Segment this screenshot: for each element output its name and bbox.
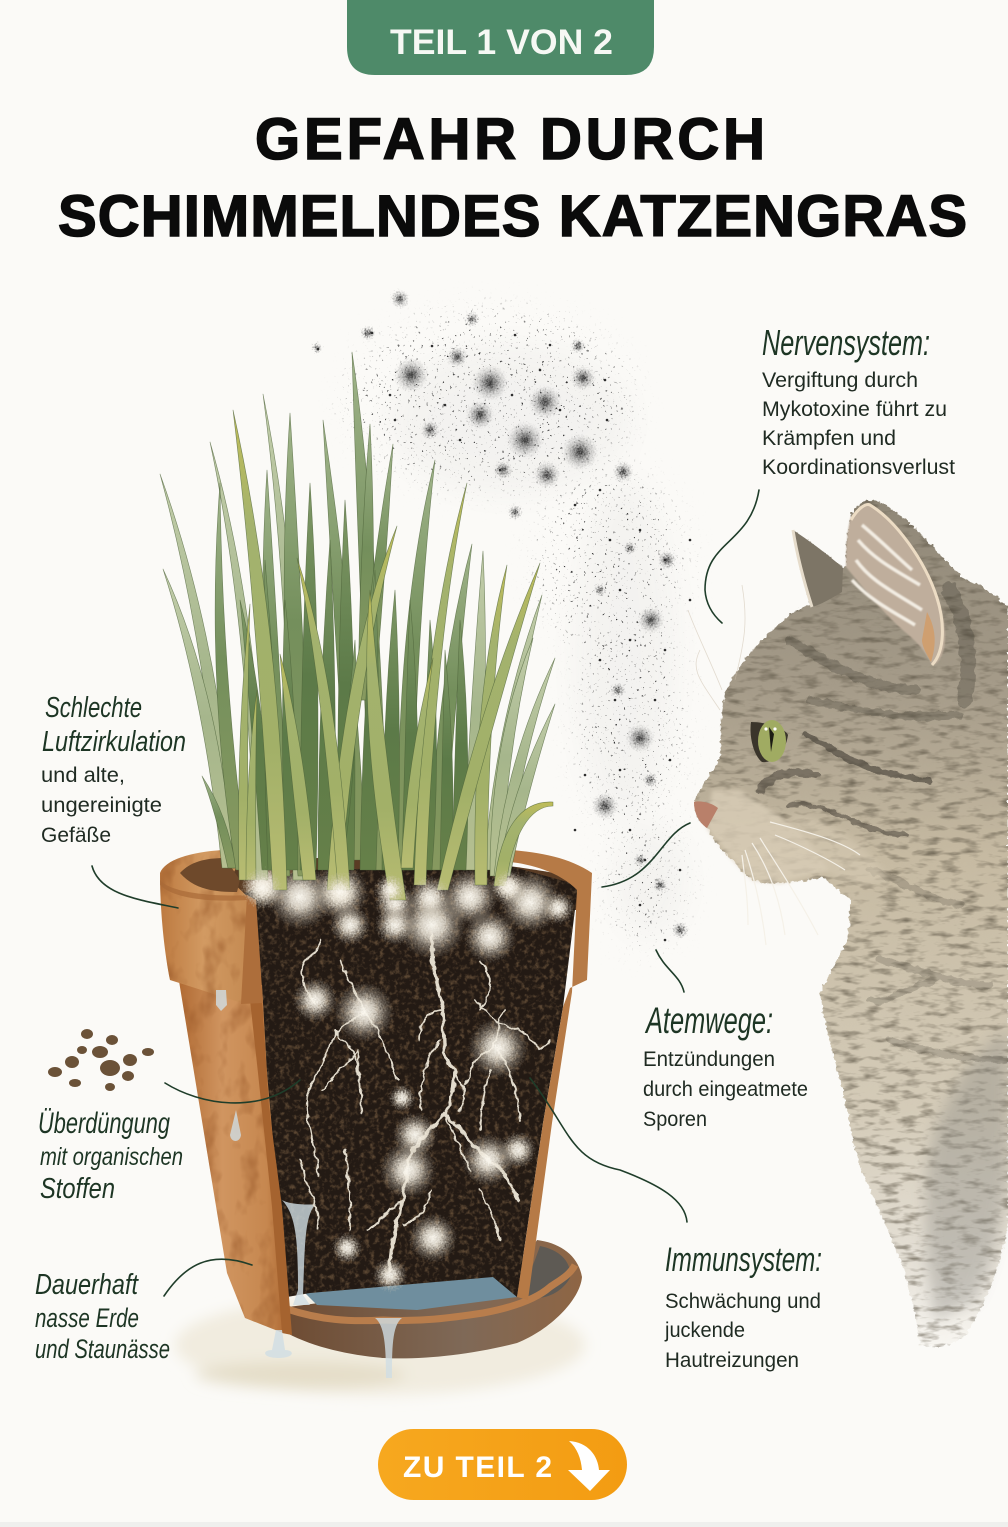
pot back wall (195, 858, 578, 910)
label: Nervensystem: Koordinationsverlust (762, 456, 955, 479)
label: Immunsystem: Hautreizungen (665, 1349, 799, 1372)
illustration: terracotta pot with mouldy soil (160, 850, 592, 1378)
label: Immunsystem (664, 1241, 822, 1372)
illustration: mould spore cloud (312, 290, 690, 945)
label: Atemwege (643, 1000, 808, 1131)
label: Dauerhaft nasse Erde: Dauerhaft (35, 1269, 140, 1301)
medium blades (202, 352, 472, 876)
label: Nervensystem: Krämpfen und (762, 427, 896, 450)
label: Überdüngung: mit organischen (40, 1143, 183, 1171)
illustration: tabby cat (688, 500, 1008, 1347)
label: Dauerhaft nasse Erde: und Staunässe (35, 1334, 170, 1364)
illustration: mould fringe over grass base (242, 868, 528, 920)
header tab: Teil 1 von 2: TEIL 1 VON 2 (390, 23, 613, 62)
label: Überdüngung: Stoffen (40, 1173, 115, 1205)
title: GEFAHR DURCH (255, 107, 765, 172)
leader lines (92, 490, 759, 1296)
cat body grey patch (926, 1030, 1008, 1320)
soil (193, 866, 578, 1297)
cat head and body (694, 500, 1008, 1347)
cat cheek light area (790, 815, 890, 884)
label: Immunsystem: Immunsystem: (665, 1241, 822, 1279)
dark middle blades (240, 483, 468, 870)
illustration: cat grass (160, 352, 555, 900)
pale back blades (160, 394, 555, 880)
label: Nervensystem: Mykotoxine führt zu (762, 398, 947, 421)
button: Zu Teil 2: ZU TEIL 2 (403, 1451, 552, 1484)
label: Schlechte Luftzirkulation (41, 692, 186, 847)
pot right wall and rim (510, 850, 592, 1300)
label: Atemwege: Entzündungen (643, 1048, 775, 1071)
icon: organic fertilizer pellets (48, 1029, 154, 1091)
cat nose (694, 801, 718, 828)
illustration: stain under pot (175, 1295, 585, 1395)
title (58, 107, 967, 249)
pot body (178, 975, 289, 1333)
standing water (305, 1275, 517, 1310)
mould roots (300, 935, 550, 1270)
cat eye (750, 720, 788, 762)
label: Schlechte Luftzirkulation: ungereinigte (41, 794, 162, 817)
front blades (233, 410, 553, 900)
label: Schlechte Luftzirkulation: Gefäße (41, 824, 111, 847)
label: Nervensystem: Nervensystem: (762, 322, 930, 363)
label: Immunsystem: juckende (664, 1319, 745, 1342)
label: Nervensystem: Vergiftung durch (762, 369, 918, 392)
saucer (287, 1240, 582, 1358)
label: Schlechte Luftzirkulation: Schlechte (45, 692, 142, 724)
white mould clusters (241, 861, 574, 1292)
label: Immunsystem: Schwächung und (665, 1290, 821, 1313)
cat face markings (760, 590, 1005, 1060)
label: Atemwege: Sporen (643, 1108, 707, 1131)
label: Schlechte Luftzirkulation: und alte, (41, 764, 125, 787)
label: Atemwege: durch eingeatmete (643, 1078, 808, 1101)
pot rim (160, 850, 263, 1004)
label: Nervensystem (762, 322, 955, 479)
title: SCHIMMELNDES KATZENGRAS (58, 184, 967, 249)
label: Überdüngung: Überdüngung (38, 1107, 170, 1140)
button: Zu Teil 2 (378, 1429, 627, 1500)
label: Schlechte Luftzirkulation: Luftzirkulation (42, 726, 186, 758)
label: Überdüngung (38, 1107, 183, 1205)
label: Dauerhaft nasse Erde: nasse Erde (35, 1303, 139, 1333)
cat ear (793, 505, 945, 665)
icon: curved down arrow (568, 1441, 610, 1491)
label: Atemwege: Atemwege: (645, 1000, 773, 1041)
cat muzzle light area (707, 790, 830, 883)
water drops (216, 990, 402, 1378)
label: Dauerhaft nasse Erde (35, 1269, 170, 1364)
cat whiskers (742, 822, 860, 945)
header tab: Teil 1 von 2 (347, 0, 654, 75)
